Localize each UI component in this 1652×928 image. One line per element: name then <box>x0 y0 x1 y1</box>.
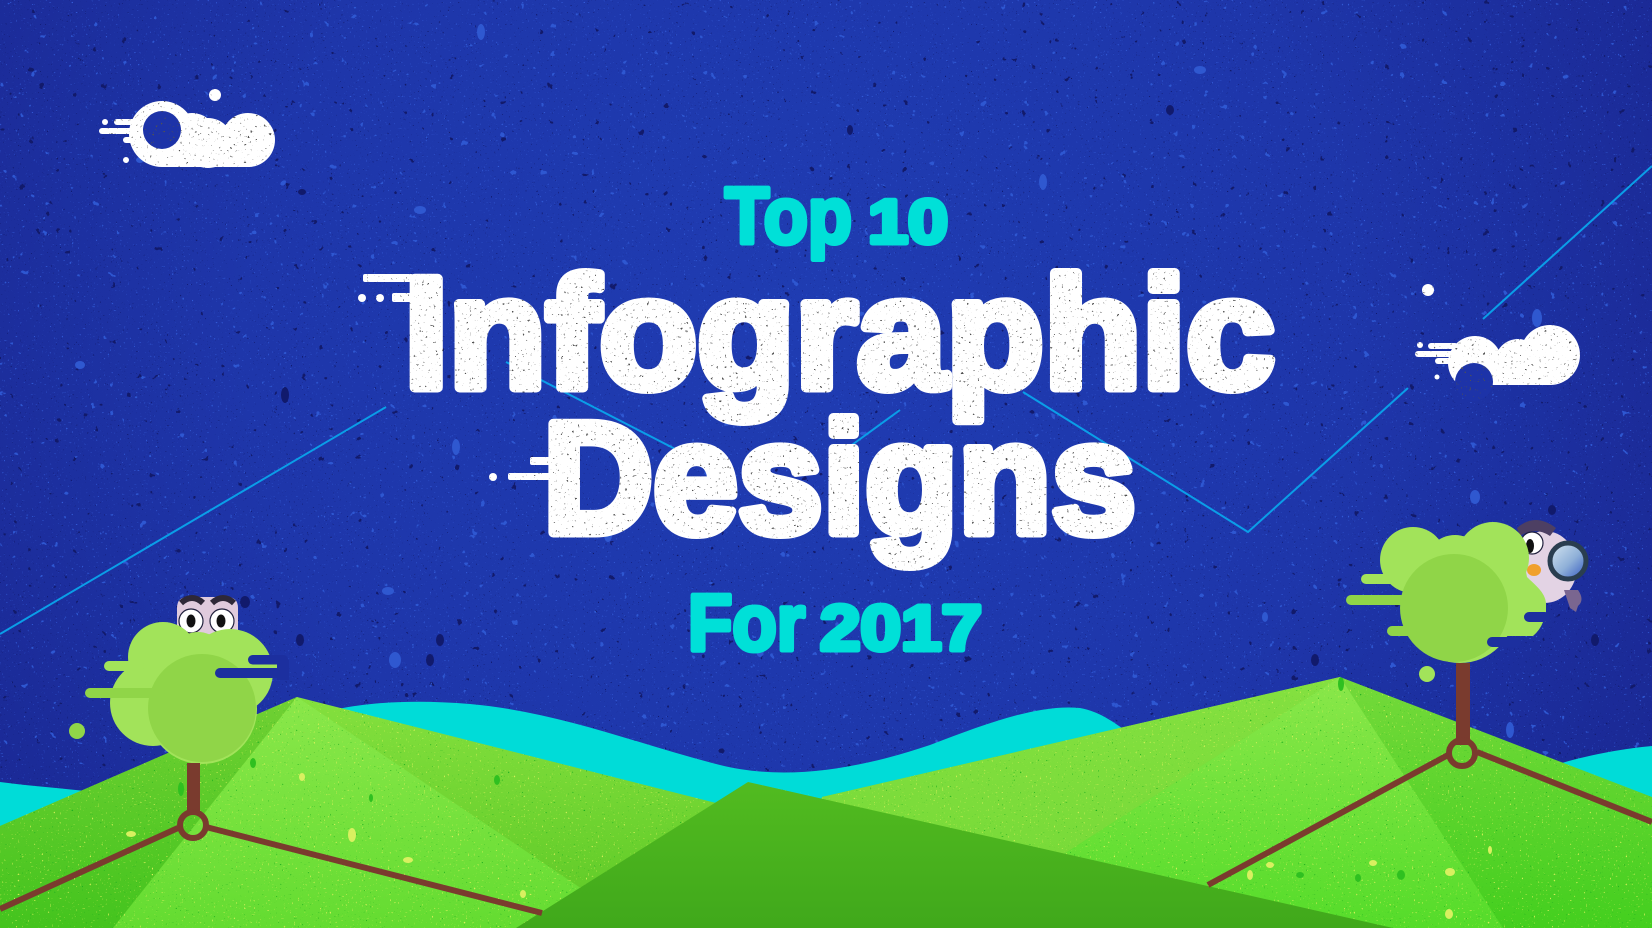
trunk and branches of right tree <box>1208 663 1652 885</box>
crown of left tree <box>85 622 289 764</box>
title: Top 10 <box>725 171 948 260</box>
title: Infographic Designs: Infographic <box>404 246 1275 422</box>
tree: right with owl and magnifier <box>1208 520 1652 885</box>
dot near right tree <box>1419 666 1435 682</box>
front dark hill <box>516 782 1393 928</box>
icon: right cloud <box>1415 284 1580 401</box>
title: Infographic Designs: Designs <box>543 390 1136 566</box>
right hill <box>800 677 1652 928</box>
trunk and branches of left tree <box>0 763 542 913</box>
crown of right tree <box>1346 522 1550 663</box>
chart line behind the title <box>0 166 1652 634</box>
owl with magnifying glass <box>1513 520 1586 612</box>
hill grain <box>0 677 1652 928</box>
icon: left cloud and moon <box>99 89 275 168</box>
subtitle: For 2017: For <box>688 578 805 667</box>
owl peeking over left tree <box>177 597 238 640</box>
title: Infographic Designs <box>358 246 1275 566</box>
title: Top 10: Top <box>725 171 852 260</box>
subtitle: For 2017: 2017 <box>820 592 982 664</box>
tree: left with owl peeking <box>0 597 542 913</box>
hills <box>0 677 1652 928</box>
title: Top 10: 10 <box>868 188 948 257</box>
left hill <box>0 697 720 928</box>
wave: teal water behind hills <box>0 702 1652 860</box>
dot near left tree <box>69 723 85 739</box>
subtitle: For 2017 <box>688 578 982 667</box>
